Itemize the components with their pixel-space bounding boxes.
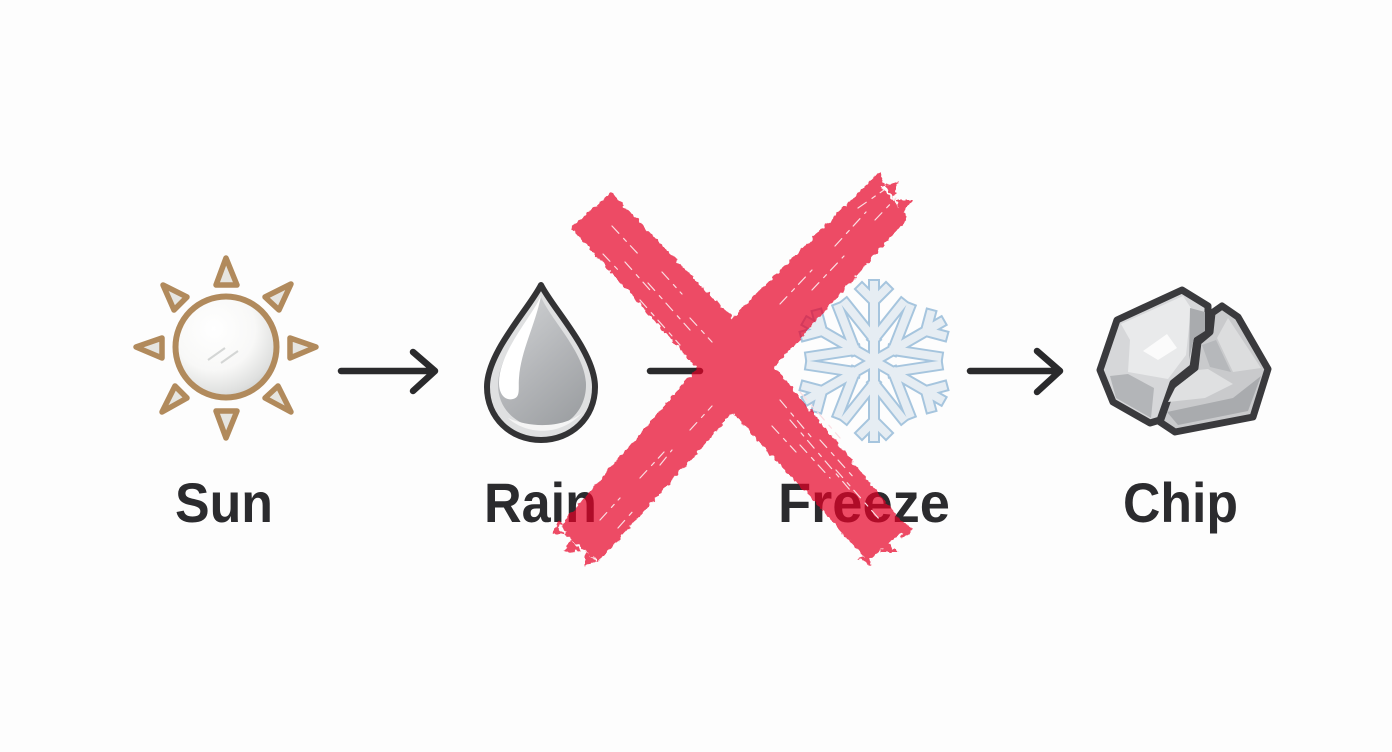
rock left piece: [1100, 290, 1208, 423]
left piece light facet: [1121, 296, 1191, 379]
brush strokes: [552, 172, 914, 566]
drop highlight: [499, 296, 541, 399]
icon: snowflake: [794, 285, 954, 437]
label: Rain: Rain: [484, 471, 597, 534]
icon: water drop: [487, 285, 595, 440]
arrow: freeze to chip: [970, 351, 1060, 392]
arrow: sun to rain: [341, 352, 435, 391]
snowflake fill: [794, 285, 954, 437]
label: Chip: Chip: [1123, 471, 1238, 534]
icon: sun: [136, 258, 316, 438]
sun disc: [176, 296, 276, 398]
icon: chipped rock: [1100, 290, 1268, 432]
right piece upper facet: [1217, 318, 1261, 372]
arrow: rain to freeze: [650, 368, 700, 374]
rock right piece: [1160, 306, 1268, 432]
label: Freeze: Freeze: [778, 471, 950, 534]
right piece inner shade: [1202, 340, 1231, 372]
snowflake outline: [794, 285, 954, 437]
right piece lower shade: [1167, 376, 1261, 425]
sun rays: [136, 258, 316, 438]
drop lower rim: [508, 412, 583, 431]
left piece right shade: [1189, 308, 1205, 360]
sun highlights: [208, 348, 238, 363]
left piece lower facet: [1110, 374, 1154, 418]
brush streaks: [600, 190, 896, 528]
label: Sun: Sun: [175, 471, 273, 534]
drop body: [498, 297, 586, 428]
right piece light facet: [1168, 369, 1233, 402]
red X crossing out rain-freeze: [552, 172, 914, 566]
drop outline: [487, 285, 595, 440]
left piece bright facet: [1143, 334, 1177, 360]
